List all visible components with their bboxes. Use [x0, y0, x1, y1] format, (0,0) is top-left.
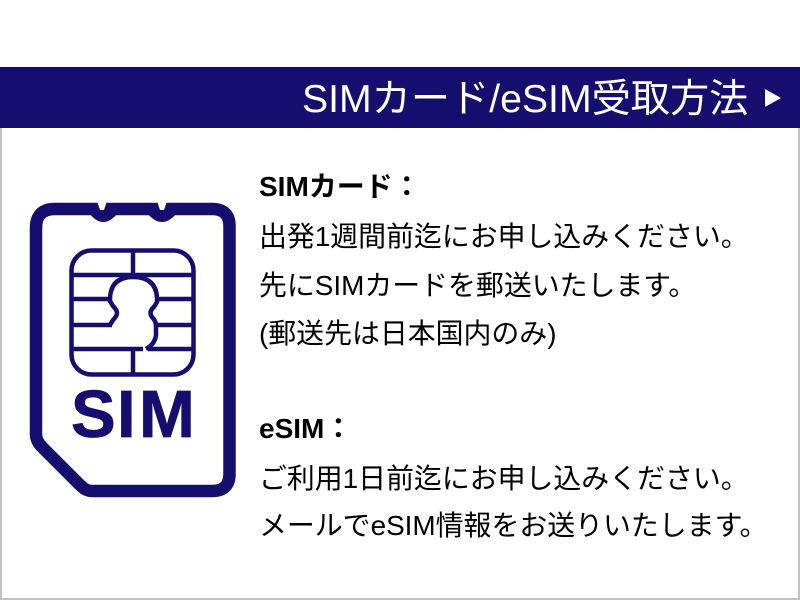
SIM label: SIM: [71, 377, 195, 452]
heading banner: [0, 67, 800, 128]
chip: [72, 250, 194, 375]
card outline: [36, 201, 230, 491]
icon: arrow triangle: [765, 89, 781, 107]
text block: eSIM heading: eSIM：: [259, 413, 352, 444]
text block: SIM card line 2: 先にSIMカードを郵送いたします。: [259, 270, 696, 301]
icon: SIM card: [30, 202, 236, 498]
text block: SIM card line 1: 出発1週間前迄にお申し込みください。: [259, 221, 749, 252]
text block: eSIM line 2: メールでeSIM情報をお送りいたします。: [259, 510, 768, 541]
heading title: SIMカード/eSIM受取方法: [302, 78, 748, 121]
text block: SIM card note: (郵送先は日本国内のみ): [259, 318, 556, 349]
text block: SIM card heading: SIMカード：: [259, 171, 421, 202]
text block: eSIM line 1: ご利用1日前迄にお申し込みください。: [259, 463, 749, 494]
panel: content frame: [0, 128, 800, 600]
